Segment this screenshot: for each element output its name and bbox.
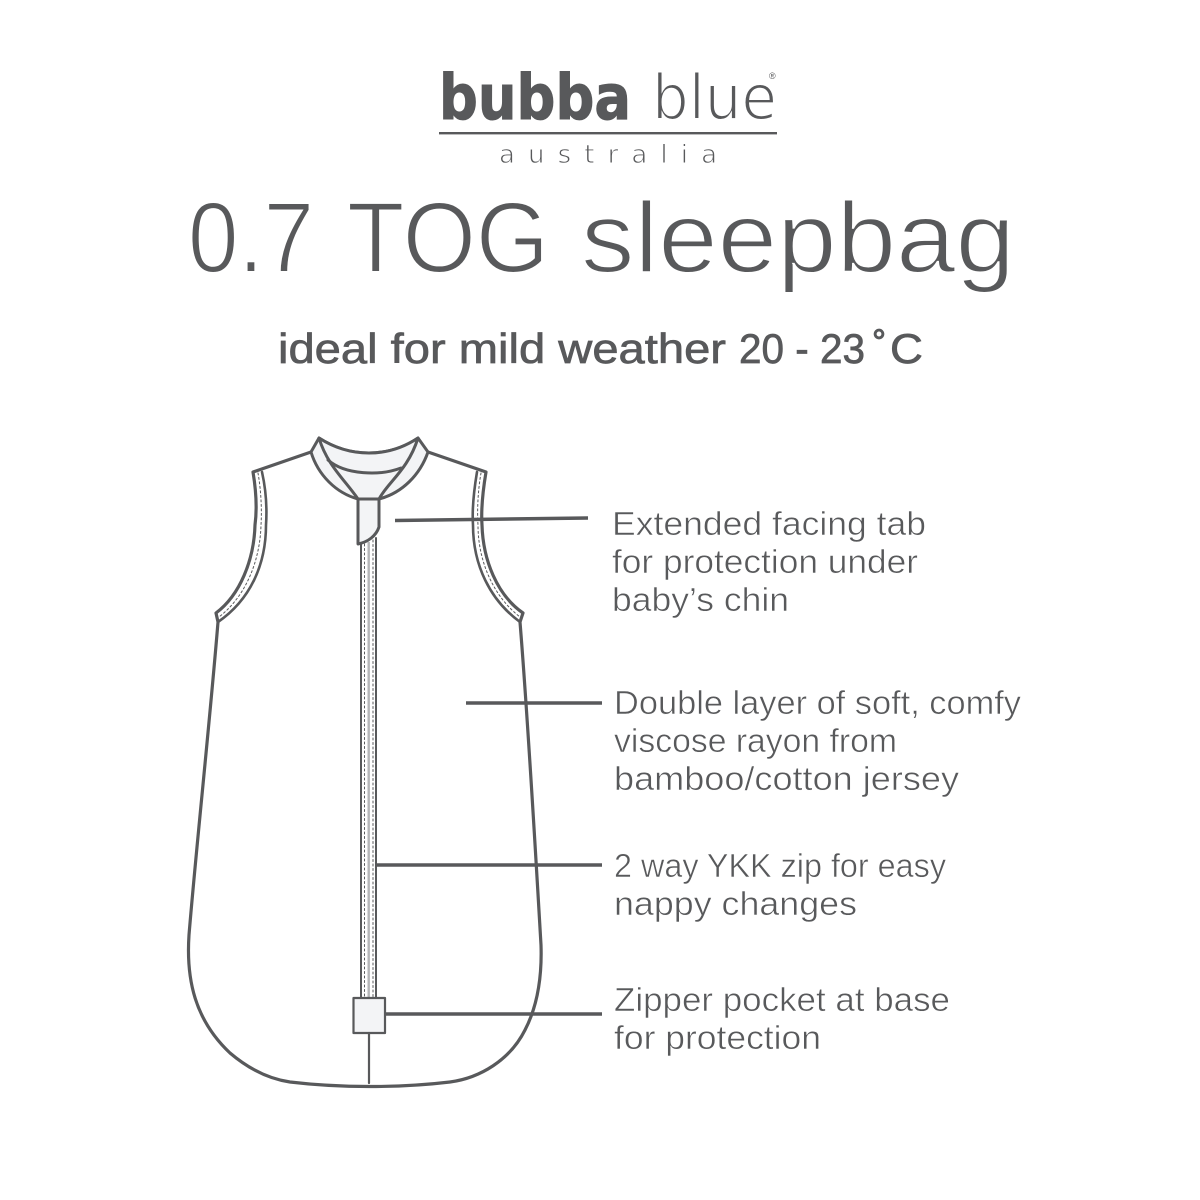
logo: bubba blue australia xyxy=(439,61,777,170)
callout 1: facing tab: Extended facing tab xyxy=(612,505,926,542)
callout 4: pocket: for protection xyxy=(614,1019,821,1056)
subtitle: ideal for mild weather xyxy=(278,325,726,372)
subtitle: ˚ xyxy=(873,325,887,372)
callout 2: double layer: bamboo/cotton jersey xyxy=(614,760,960,797)
title: sleepbag xyxy=(581,182,1015,294)
body outline xyxy=(188,452,541,1086)
logo: bubba blue australia: blue xyxy=(652,61,777,134)
callout 2: double layer: Double layer of soft, comfy xyxy=(614,684,1022,721)
left armhole binding xyxy=(218,472,266,622)
title xyxy=(188,182,1015,294)
logo: bubba blue australia: australia xyxy=(499,140,717,170)
inner neck xyxy=(319,438,418,499)
subtitle: C xyxy=(890,325,923,372)
callout 1: facing tab: for protection under xyxy=(612,543,918,580)
bottom seam xyxy=(368,1033,370,1083)
logo: bubba blue australia: ® xyxy=(769,71,776,81)
callout 3: zip: 2 way YKK zip for easy xyxy=(614,847,946,884)
callout 2: double layer: viscose rayon from xyxy=(614,722,897,759)
callout 2: double layer xyxy=(466,684,1022,797)
logo: bubba blue australia: bubba xyxy=(439,61,631,134)
collar xyxy=(311,438,428,499)
title: TOG xyxy=(347,182,549,294)
subtitle: 20 - 23 xyxy=(739,325,865,372)
zipper pocket xyxy=(354,998,385,1033)
callout 3: zip: nappy changes xyxy=(614,885,857,922)
callout 1: facing tab xyxy=(395,505,926,618)
zip xyxy=(361,538,376,998)
callout 4: pocket: Zipper pocket at base xyxy=(614,981,950,1018)
subtitle xyxy=(278,325,923,372)
title: 0.7 xyxy=(188,182,314,294)
callout 3: zip xyxy=(375,847,946,922)
callout 1: facing tab: baby’s chin xyxy=(612,581,789,618)
right armhole binding xyxy=(473,472,520,622)
sleepbag illustration xyxy=(188,438,541,1086)
facing tab xyxy=(358,499,379,544)
callout 4: pocket xyxy=(385,981,950,1056)
